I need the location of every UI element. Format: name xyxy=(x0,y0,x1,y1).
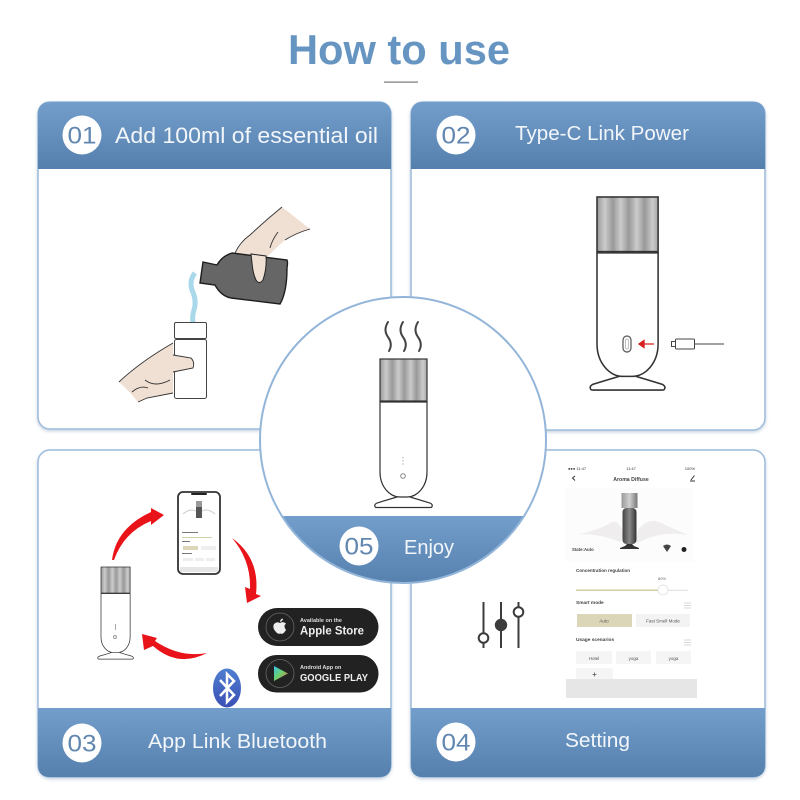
icon: lower hand xyxy=(119,343,194,402)
app usage scenarios: yoga xyxy=(669,656,679,661)
app concentration slider xyxy=(576,568,688,595)
app status bar: ●●● 11:47 xyxy=(568,466,587,471)
icon: grey bottle xyxy=(200,253,288,304)
number badge 04: 04 xyxy=(442,730,470,756)
app concentration slider: 80% xyxy=(658,576,666,581)
icon: pouring water xyxy=(191,273,195,323)
app usage scenarios: + xyxy=(592,670,597,679)
number badge 02: 02 xyxy=(442,122,470,150)
badge: apple store xyxy=(258,608,378,646)
panel: step 03 bluetooth xyxy=(38,450,391,777)
number badge 03: 03 xyxy=(68,730,96,758)
heading 05: Enjoy xyxy=(404,537,454,559)
panel: step 04 setting xyxy=(411,450,765,777)
header 01 xyxy=(38,102,391,169)
app smart mode xyxy=(576,600,691,627)
icon: hand outline xyxy=(235,207,310,253)
badge: apple store: Available on the xyxy=(300,618,342,624)
icon: bluetooth xyxy=(213,668,241,708)
number badge 05: 05 xyxy=(344,534,374,560)
icon: diffuser device xyxy=(375,359,432,508)
app bottom bar xyxy=(566,679,697,698)
number badge 04 xyxy=(436,722,476,762)
app status bar xyxy=(568,466,695,471)
header 03 xyxy=(38,708,391,777)
icon: device with port xyxy=(590,197,665,390)
badge: google play: GOOGLE PLAY xyxy=(300,673,368,684)
number badge 05 xyxy=(340,526,378,566)
heading 04: Setting xyxy=(565,730,630,752)
app product image xyxy=(566,488,694,562)
app title bar xyxy=(572,476,695,483)
number badge 02 xyxy=(436,116,476,154)
arrow: device to phone xyxy=(112,508,164,560)
icon: sliders xyxy=(479,602,523,648)
app smart mode: Smart mode xyxy=(576,600,604,606)
banner 05 xyxy=(283,516,523,582)
app title bar: Aroma Diffuse xyxy=(613,477,649,483)
icon: steam xyxy=(386,322,421,351)
arrow: red to port xyxy=(639,340,654,348)
number badge 01: 01 xyxy=(68,122,96,150)
app screenshot xyxy=(566,466,697,698)
header 04 xyxy=(411,708,765,777)
app usage scenarios: yoga xyxy=(629,656,639,661)
arrow: store to device xyxy=(142,634,207,659)
badge: google play xyxy=(258,655,378,692)
app status bar: 100% xyxy=(685,466,695,471)
app smart mode: Fast Smell Mode xyxy=(646,618,680,624)
app usage scenarios: Usage scenarios xyxy=(576,637,614,643)
badge: apple store: Apple Store xyxy=(300,626,364,638)
app product image: State:Auto xyxy=(572,547,594,552)
icon: type-c cable xyxy=(672,339,724,349)
title: How to use xyxy=(288,26,510,73)
badge: google play: Android App on xyxy=(300,665,342,671)
number badge 01 xyxy=(62,116,102,154)
title underline xyxy=(384,82,418,83)
icon: hand finger xyxy=(251,254,266,282)
app status bar: 11:47 xyxy=(626,466,637,471)
icon: clear bottle xyxy=(174,322,206,398)
arrow: phone to store xyxy=(232,538,261,603)
app usage scenarios xyxy=(576,637,691,679)
heading 01: Add 100ml of essential oil xyxy=(115,123,378,148)
icon: small device xyxy=(98,567,133,659)
heading 03: App Link Bluetooth xyxy=(148,731,327,753)
panel: step 02 power xyxy=(411,102,765,430)
header 02 xyxy=(411,102,765,169)
app smart mode: Auto xyxy=(599,618,609,624)
number badge 03 xyxy=(62,724,102,762)
panel: step 01 add oil xyxy=(38,102,391,429)
icon: upper hand xyxy=(235,207,310,263)
heading 02: Type-C Link Power xyxy=(515,123,689,145)
app concentration slider: Concentration regulation xyxy=(576,568,630,574)
center circle: step 05 enjoy xyxy=(250,297,560,586)
icon: phone xyxy=(178,492,220,574)
app usage scenarios: Hotel xyxy=(589,656,599,661)
